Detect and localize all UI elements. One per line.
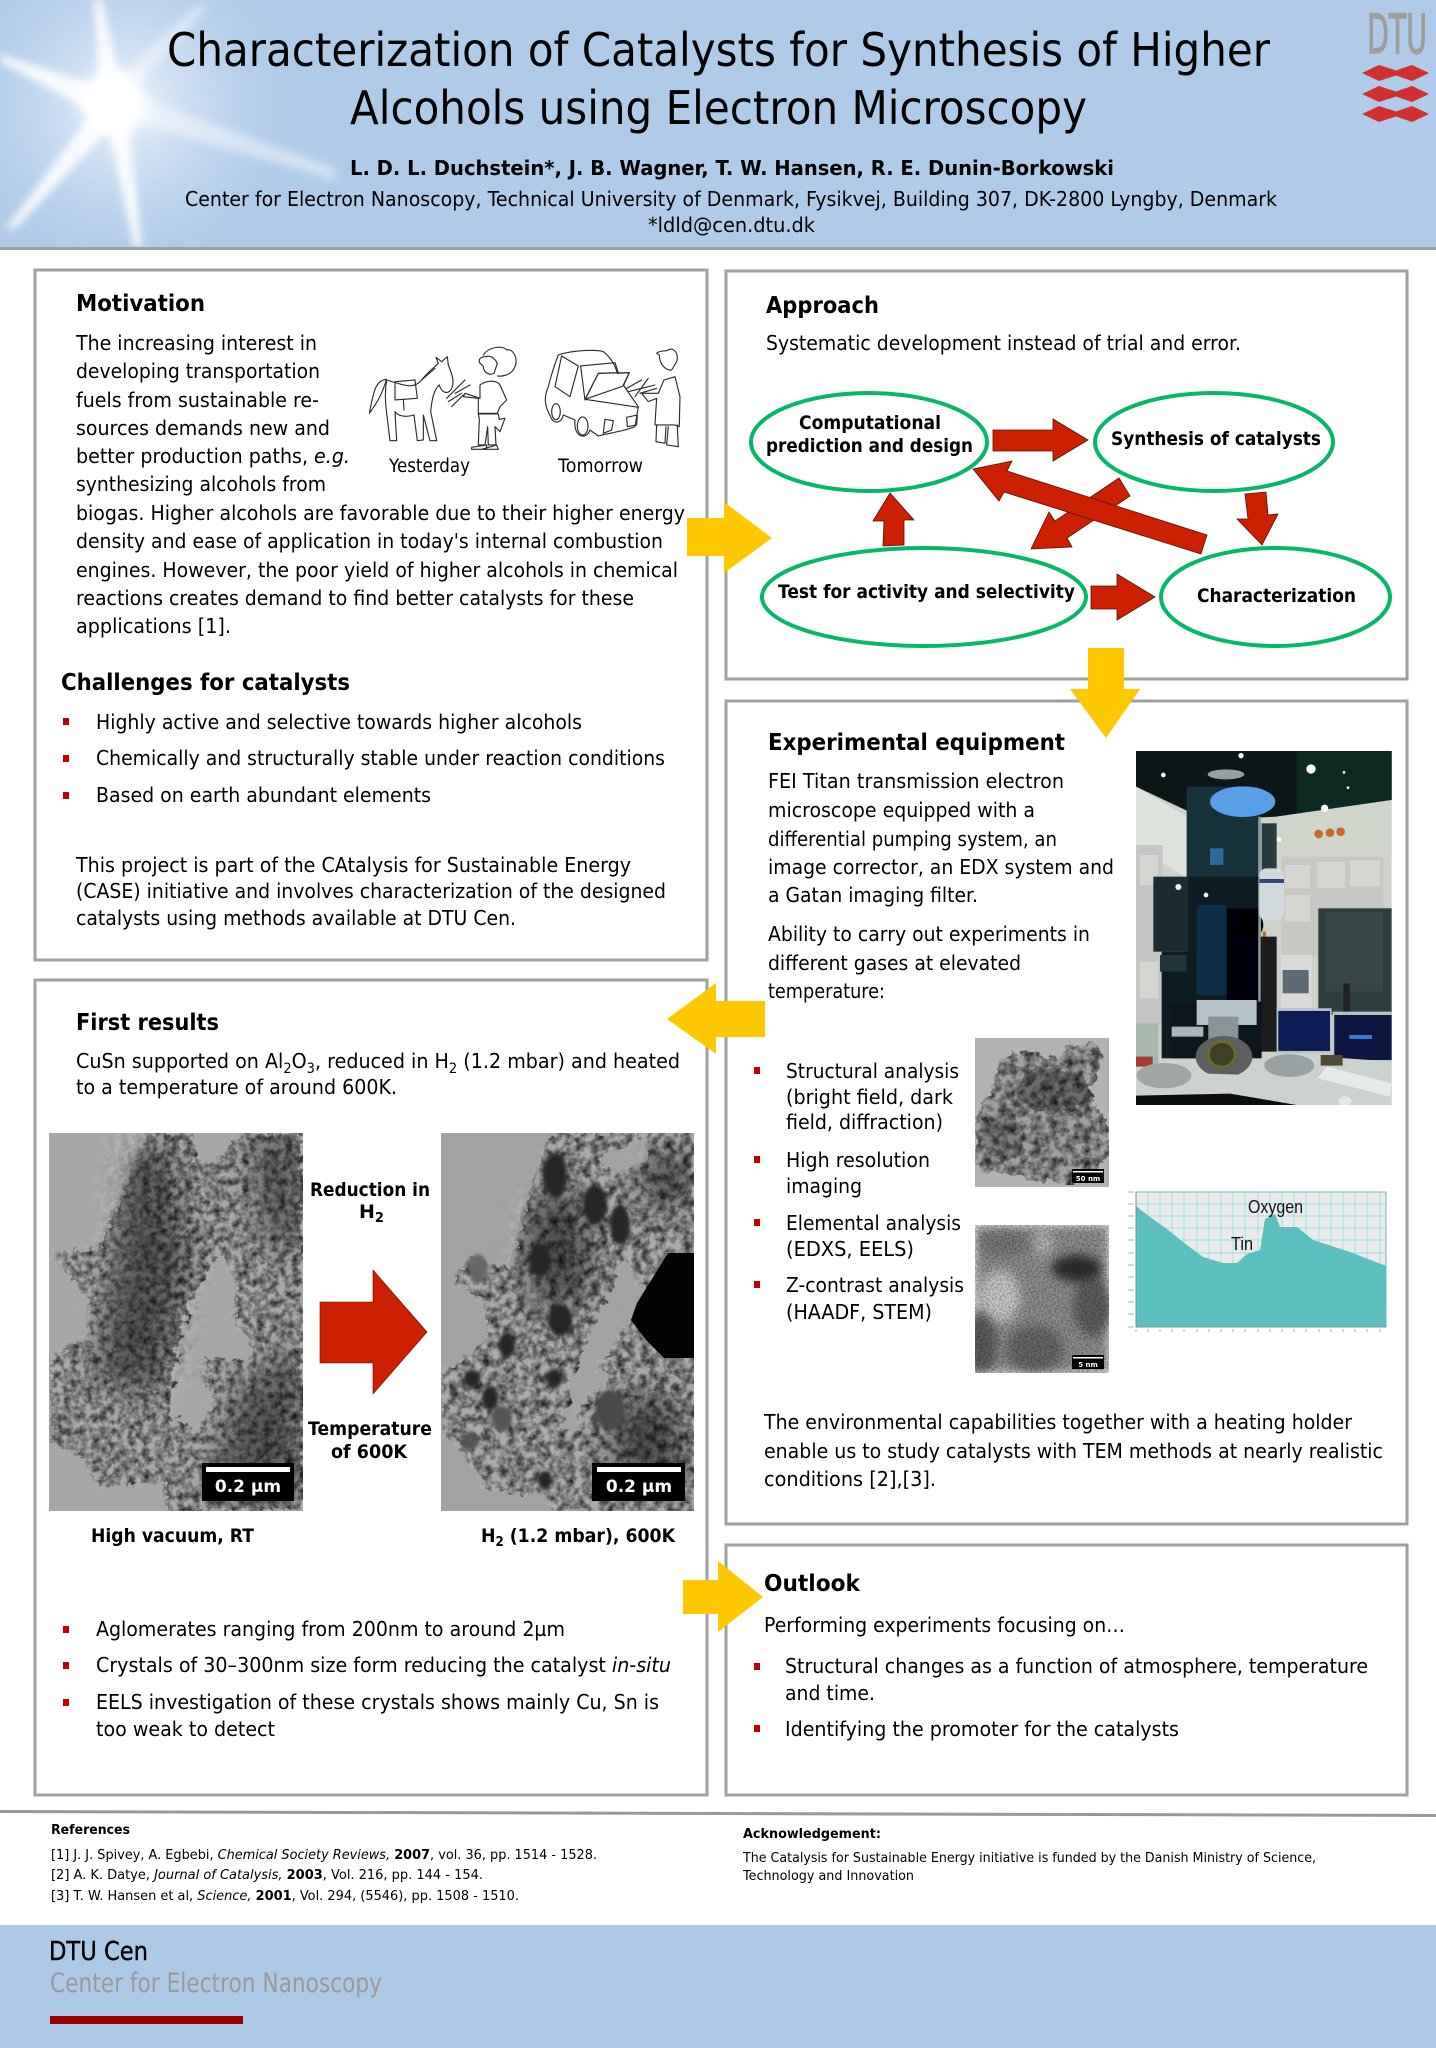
text block: first results intro: O <box>292 1049 307 1073</box>
text block: motivation: synthesizing alcohols from <box>76 472 326 496</box>
arrow: characterization to prediction <box>973 461 1207 554</box>
icon: man with car <box>545 349 680 447</box>
scale bar <box>592 1463 685 1501</box>
arrow: prediction to synthesis <box>993 419 1088 461</box>
caption: H2: (1.2 mbar), 600K <box>504 1525 676 1547</box>
text block: first results intro: , reduced in H <box>315 1049 449 1073</box>
footer: DTU Cen: DTU Cen <box>49 1937 148 1967</box>
node: characterization <box>1161 548 1390 646</box>
header banner <box>0 0 1436 250</box>
text block: project: This project is part of the CAtalysis for Sustainable Energy <box>75 853 631 877</box>
text block: capabilities: Ability to carry out experiments in <box>768 922 1090 946</box>
text block: motivation <box>75 331 685 638</box>
references: [1] J. J. Spivey, A. Egbebi, Chemical Society Reviews, 2007, vol. 36, pp. 1514 - 1528. <box>51 1847 597 1863</box>
photo: Titan microscope <box>1136 751 1392 1106</box>
title: Alcohols using Electron Microscopy <box>350 81 1087 135</box>
arrow: equipment to results <box>667 983 765 1054</box>
arrow: test to prediction <box>873 493 914 546</box>
affiliation: *ldld@cen.dtu.dk <box>648 213 815 237</box>
bullet list: techniques: (EDXS, EELS) <box>786 1237 914 1261</box>
text block: microscope description: image corrector, an EDX system and <box>768 855 1114 879</box>
bullet list: techniques: Structural analysis <box>786 1059 959 1083</box>
text block: first results intro: (1.2 mbar) and heated <box>457 1049 680 1073</box>
arrow: results to outlook <box>683 1561 763 1632</box>
text block: first results intro: 3 <box>307 1061 315 1077</box>
text block: motivation: developing transportation <box>76 359 320 383</box>
text block: microscope description: FEI Titan transmission electron <box>768 769 1064 793</box>
micrograph: bright field <box>975 1038 1109 1187</box>
text block: motivation: density and ease of application in today's internal combustion <box>76 529 663 553</box>
text block: capabilities: temperature: <box>768 979 885 1003</box>
bullet list: techniques: (HAADF, STEM) <box>786 1300 932 1324</box>
scale bar: 0.2 µm <box>215 1477 281 1497</box>
micrograph: high resolution <box>975 1225 1109 1373</box>
text block: microscope description: a Gatan imaging filter. <box>768 883 978 907</box>
label: temperature <box>308 1418 432 1463</box>
bullet list: results: Crystals of 30–300nm size form reducing the catalyst in-situ <box>96 1653 671 1677</box>
sunburst glare <box>0 0 337 247</box>
text block: conclusion: conditions [2],[3]. <box>764 1467 936 1491</box>
label: reduction in H2: Reduction in <box>310 1179 430 1201</box>
text block: microscope description: differential pumping system, an <box>768 827 1057 851</box>
text block: motivation: applications [1]. <box>76 614 231 638</box>
text block: first results intro <box>76 1049 680 1099</box>
bullet list: challenges <box>63 710 665 807</box>
bullet list: outlook: Identifying the promoter for the catalysts <box>785 1717 1179 1741</box>
panel: experimental equipment <box>726 701 1407 1524</box>
bullet list: techniques: field, diffraction) <box>786 1110 943 1134</box>
text: approach intro: Systematic development instead of trial and error. <box>766 331 1241 355</box>
logo: DTU <box>1362 3 1429 122</box>
references: [3] T. W. Hansen et al, Science, 2001, Vol. 294, (5546), pp. 1508 - 1510. <box>51 1888 519 1904</box>
arrow: test to characterization <box>1091 574 1155 620</box>
panel: motivation <box>35 270 707 960</box>
bullet list: techniques: Z-contrast analysis <box>786 1273 964 1297</box>
panel: outlook <box>726 1545 1407 1795</box>
text block: motivation: fuels from sustainable re- <box>76 388 319 412</box>
arrow: synthesis to characterization <box>1237 492 1278 545</box>
title: Characterization of Catalysts for Synthesis of Higher <box>167 23 1270 77</box>
caption: high vacuum: High vacuum, RT <box>91 1525 254 1547</box>
text block: capabilities <box>768 922 1090 1003</box>
arrow: approach to equipment <box>1070 648 1140 738</box>
text block: motivation: sources demands new and <box>76 416 330 440</box>
node: synthesis: Synthesis of catalysts <box>1111 428 1321 450</box>
text block: first results intro: CuSn supported on Al <box>76 1049 298 1073</box>
label: temperature: Temperature <box>308 1418 432 1440</box>
text block: first results intro: 2 <box>449 1061 457 1077</box>
bullet list: outlook <box>754 1654 1368 1741</box>
node: characterization: Characterization <box>1197 585 1356 607</box>
node: computational prediction <box>751 393 987 491</box>
caption: H2: H <box>481 1525 497 1547</box>
text block: first results intro: 2 <box>283 1061 292 1077</box>
bullet list: outlook: and time. <box>785 1681 875 1705</box>
scale bar: 50 nm <box>1076 1175 1100 1183</box>
node: computational prediction: Computational <box>799 412 941 434</box>
bullet list: challenges: Chemically and structurally stable under reaction conditions <box>96 746 665 770</box>
text block: motivation: reactions creates demand to find better catalysts for these <box>76 586 634 610</box>
text block: conclusion <box>763 1410 1383 1491</box>
heading: motivation: Motivation <box>76 291 205 317</box>
bullet list: results: EELS investigation of these crystals shows mainly Cu, Sn is <box>96 1690 659 1714</box>
text block: project: (CASE) initiative and involves characterization of the designed <box>76 879 666 903</box>
references: References <box>51 1822 130 1838</box>
heading: experimental equipment: Experimental equipment <box>768 730 1065 756</box>
heading: approach: Approach <box>766 293 879 319</box>
text block: first results intro: to a temperature of around 600K. <box>76 1075 397 1099</box>
bullet list: results: too weak to detect <box>96 1717 275 1741</box>
node: computational prediction: prediction and design <box>766 435 973 457</box>
icon: cowboy with horse <box>369 347 516 449</box>
footer: center name: Center for Electron Nanoscopy <box>50 1968 382 1999</box>
bullet list: challenges: Highly active and selective towards higher alcohols <box>96 710 582 734</box>
footer rule <box>0 1810 1436 1817</box>
text block: motivation: better production paths, e.g. <box>76 444 350 468</box>
text: outlook intro: Performing experiments focusing on… <box>764 1613 1125 1637</box>
bullet list: techniques: High resolution <box>786 1148 930 1172</box>
heading: first results: First results <box>76 1010 219 1036</box>
bullet list: results: Aglomerates ranging from 200nm to around 2µm <box>96 1617 565 1641</box>
label: reduction in H2 <box>310 1179 430 1226</box>
scale bar <box>1072 1169 1104 1183</box>
bullet list: results <box>63 1617 671 1741</box>
arrow: motivation to approach <box>687 502 772 573</box>
label: temperature: of 600K <box>331 1441 408 1463</box>
text block: microscope description <box>768 769 1114 907</box>
acknowledgement: Technology and Innovation <box>742 1868 914 1884</box>
text block: microscope description: microscope equipped with a <box>768 798 1035 822</box>
text block: motivation: biogas. Higher alcohols are favorable due to their higher energy <box>76 501 685 525</box>
heading: outlook: Outlook <box>764 1571 861 1597</box>
text block: conclusion: The environmental capabilities together with a heating holder <box>763 1410 1353 1434</box>
text block: motivation: The increasing interest in <box>75 331 317 355</box>
arrow: reaction <box>320 1270 427 1394</box>
caption: H2: 2 <box>495 1535 504 1550</box>
text block: conclusion: enable us to study catalysts with TEM methods at nearly realistic <box>764 1439 1383 1463</box>
text block: capabilities: different gases at elevated <box>768 951 1021 975</box>
micrograph: high vacuum <box>49 1133 303 1512</box>
panel: first results <box>35 980 707 1795</box>
heading: challenges: Challenges for catalysts <box>61 670 350 696</box>
bullet list: techniques: imaging <box>786 1174 862 1198</box>
affiliation: Center for Electron Nanoscopy, Technical University of Denmark, Fysikvej, Building 307, DK-2800 Lyngby, Denmark <box>185 187 1277 211</box>
footer band <box>0 1925 1436 2048</box>
text block: project: catalysts using methods available at DTU Cen. <box>76 906 516 930</box>
references <box>51 1822 597 1904</box>
bullet list: techniques: Elemental analysis <box>786 1211 961 1235</box>
label: reduction in H2: 2 <box>375 1211 384 1226</box>
bullet list: techniques <box>754 1059 964 1324</box>
node: synthesis <box>1095 393 1333 491</box>
bullet list: techniques: (bright field, dark <box>786 1085 953 1109</box>
label: reduction in H2: H <box>359 1201 375 1223</box>
scale bar <box>1072 1355 1104 1369</box>
bullet list: challenges: Based on earth abundant elements <box>96 783 431 807</box>
node: test: Test for activity and selectivity <box>778 581 1076 603</box>
text block: project <box>75 853 666 930</box>
micrograph: H2 600K <box>441 1133 694 1512</box>
chart: EELS spectrum <box>1128 1192 1386 1332</box>
acknowledgement: Acknowledgement: <box>743 1826 881 1842</box>
footer: red bar <box>50 2016 243 2024</box>
bullet list: outlook: Structural changes as a function of atmosphere, temperature <box>785 1654 1368 1678</box>
node: test <box>762 548 1086 646</box>
acknowledgement <box>742 1826 1316 1884</box>
label: tin: Tin <box>1231 1234 1253 1254</box>
caption: yesterday: Yesterday <box>388 456 470 477</box>
scale bar <box>202 1463 294 1501</box>
arrow: synthesis to test <box>1031 478 1130 549</box>
affiliation <box>185 187 1277 237</box>
text block: motivation: engines. However, the poor yield of higher alcohols in chemical <box>76 558 678 582</box>
label: oxygen: Oxygen <box>1248 1197 1303 1217</box>
authors: L. D. L. Duchstein*, J. B. Wagner, T. W. Hansen, R. E. Dunin-Borkowski <box>350 156 1114 180</box>
caption: tomorrow: Tomorrow <box>557 456 643 477</box>
title <box>167 23 1270 135</box>
acknowledgement: The Catalysis for Sustainable Energy initiative is funded by the Danish Ministry of Science, <box>742 1850 1316 1866</box>
panel: approach <box>726 271 1407 679</box>
references: [2] A. K. Datye, Journal of Catalysis, 2003, Vol. 216, pp. 144 - 154. <box>51 1867 483 1883</box>
scale bar: 5 nm <box>1078 1361 1098 1369</box>
scale bar: 0.2 µm <box>606 1477 672 1497</box>
